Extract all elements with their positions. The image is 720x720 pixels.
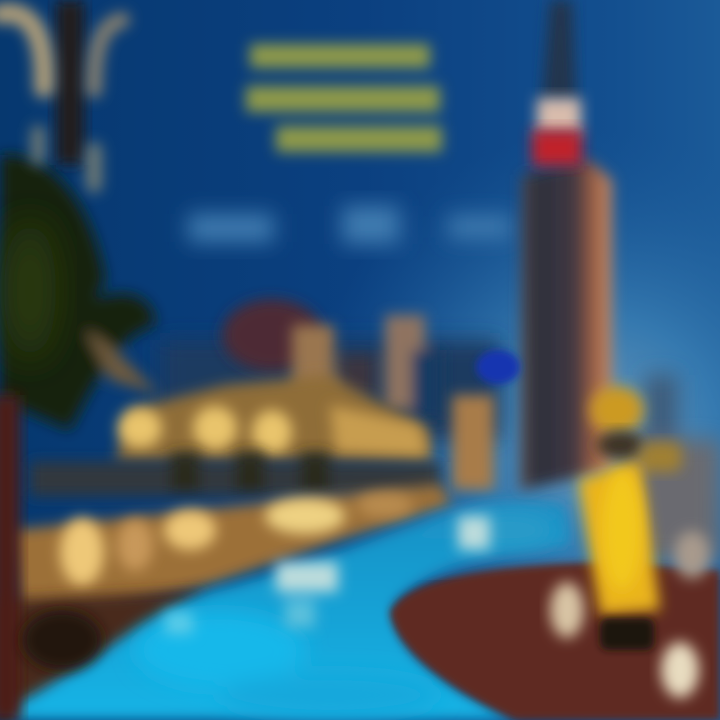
swimming pool <box>15 502 570 720</box>
tower white crown <box>537 98 581 134</box>
yellow figure <box>578 386 682 650</box>
distant skyline haze <box>160 340 720 560</box>
caption row (illegible pale text) <box>188 206 512 244</box>
figure legs <box>600 618 654 650</box>
title block (illegible yellow lettering) <box>246 44 442 152</box>
figure dark collar <box>596 431 644 459</box>
hotel dome <box>222 299 322 371</box>
skyscraper <box>520 0 612 490</box>
dark terrace band <box>30 452 440 496</box>
pool white reflections <box>165 516 490 634</box>
figure head <box>590 386 644 434</box>
blue sign <box>476 350 520 384</box>
sky lower glow <box>240 80 720 580</box>
tower red crown <box>532 130 582 166</box>
pool bright highlights <box>135 514 555 717</box>
figure body <box>578 460 660 615</box>
pale fronds <box>0 13 122 185</box>
hotel glowing windows <box>118 405 428 458</box>
deck lamp 1 <box>550 582 584 638</box>
palm foliage <box>0 155 160 430</box>
tower body <box>520 160 612 490</box>
hotel complex <box>115 299 494 490</box>
foreground dark shrub <box>22 610 102 670</box>
hotel side tower <box>292 315 442 420</box>
colonnade lights <box>60 493 413 586</box>
hotel golden facade <box>115 375 494 490</box>
palm tree <box>0 0 160 720</box>
palm lower trunk <box>0 395 20 720</box>
tower spire <box>542 0 576 100</box>
figure arm <box>640 442 682 472</box>
deck lamp 3 <box>674 531 710 579</box>
wooden deck <box>390 531 720 720</box>
deck lamp 2 <box>661 642 699 698</box>
lower-left shoreline <box>0 590 210 720</box>
palm upper trunk <box>56 0 84 165</box>
lower colonnade <box>12 484 452 620</box>
